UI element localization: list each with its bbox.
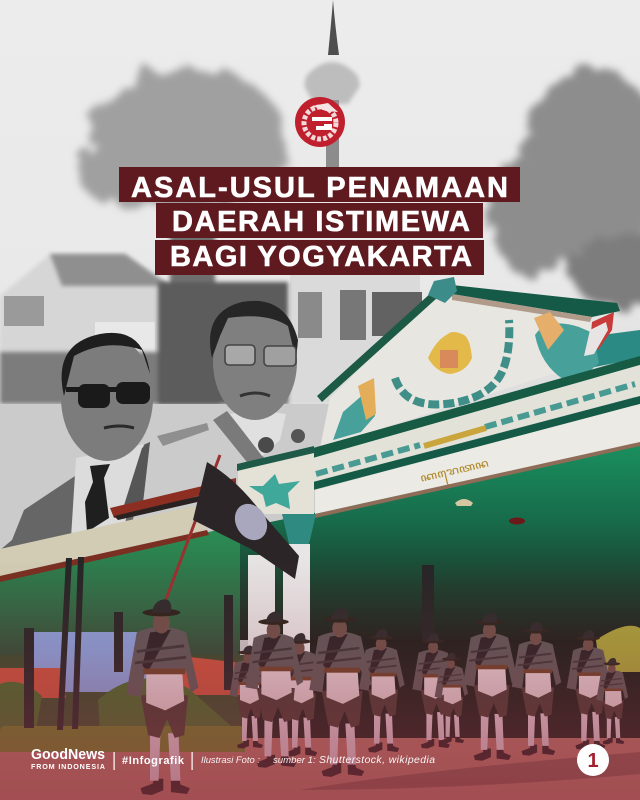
frieze ornament: [316, 384, 635, 474]
separator: [192, 752, 193, 770]
soldier: [463, 612, 518, 761]
title: [119, 167, 520, 275]
brand: FROM INDONESIA: [31, 762, 105, 771]
frieze: [313, 365, 640, 482]
hashtag: #Infografik: [122, 755, 185, 767]
soldier: [567, 630, 611, 750]
cornice: [313, 356, 640, 458]
page number: [577, 744, 609, 776]
soldier: [126, 599, 198, 795]
white band: [315, 404, 640, 514]
ground: [0, 738, 640, 800]
lower left scene: [0, 632, 245, 752]
road: [0, 404, 330, 554]
lower cornice: [313, 396, 640, 490]
soldier: [412, 633, 455, 749]
pediment face: [320, 292, 630, 448]
soldier: [309, 608, 372, 777]
soldier: [359, 629, 405, 753]
column block: [238, 452, 314, 514]
green ceiling left: [0, 525, 240, 660]
left beam: [0, 505, 206, 576]
roof finial: [428, 277, 457, 303]
soldier: [245, 611, 303, 768]
posts: [24, 557, 434, 730]
portrait: man in suit: [0, 333, 153, 588]
emblem: [428, 332, 472, 374]
green ceiling right: [232, 445, 640, 640]
right small roof: [590, 330, 640, 368]
pendopo building: [0, 277, 640, 752]
soldier: [230, 646, 268, 748]
colonial building: [0, 254, 288, 404]
lamp: [455, 499, 473, 506]
column capital: [282, 514, 316, 544]
monument tower: [290, 0, 422, 402]
brand: [31, 747, 105, 771]
credit names: Shutterstock, wikipedia: [319, 755, 435, 766]
soldiers: [126, 599, 628, 795]
roof edge right: [452, 285, 620, 317]
left red roof: [110, 478, 236, 518]
title line 1: ASAL-USUL PENAMAAN: [131, 172, 508, 204]
naga right: [534, 312, 614, 379]
javanese inscription: ꦏꦫꦺꦠꦤ: [419, 457, 492, 492]
red colour wash: [0, 560, 640, 800]
logo: [295, 97, 345, 147]
naga left: [333, 378, 376, 440]
credit source: sumber 1:: [273, 755, 316, 766]
portrait: man in uniform: [141, 301, 331, 520]
dark background behind soldiers: [245, 640, 640, 740]
soldier: [512, 622, 561, 756]
title line 2: DAERAH ISTIMEWA: [172, 206, 470, 238]
separator: [114, 752, 115, 770]
page number: 1: [587, 750, 599, 772]
right tree: [492, 70, 640, 308]
soldier: [277, 633, 323, 757]
flag: [165, 455, 299, 602]
left tree: [78, 68, 287, 335]
columns: [248, 544, 310, 656]
soldier: [435, 653, 468, 743]
soldier: [596, 658, 628, 744]
credit: Ilustrasi Foto :: [201, 754, 260, 765]
footer: [31, 744, 609, 776]
wreath: [395, 320, 509, 404]
roof edge left: [317, 292, 437, 402]
title line 3: BAGI YOGYAKARTA: [170, 241, 472, 273]
brand: GoodNews: [31, 747, 105, 763]
brown trim: [315, 442, 640, 518]
